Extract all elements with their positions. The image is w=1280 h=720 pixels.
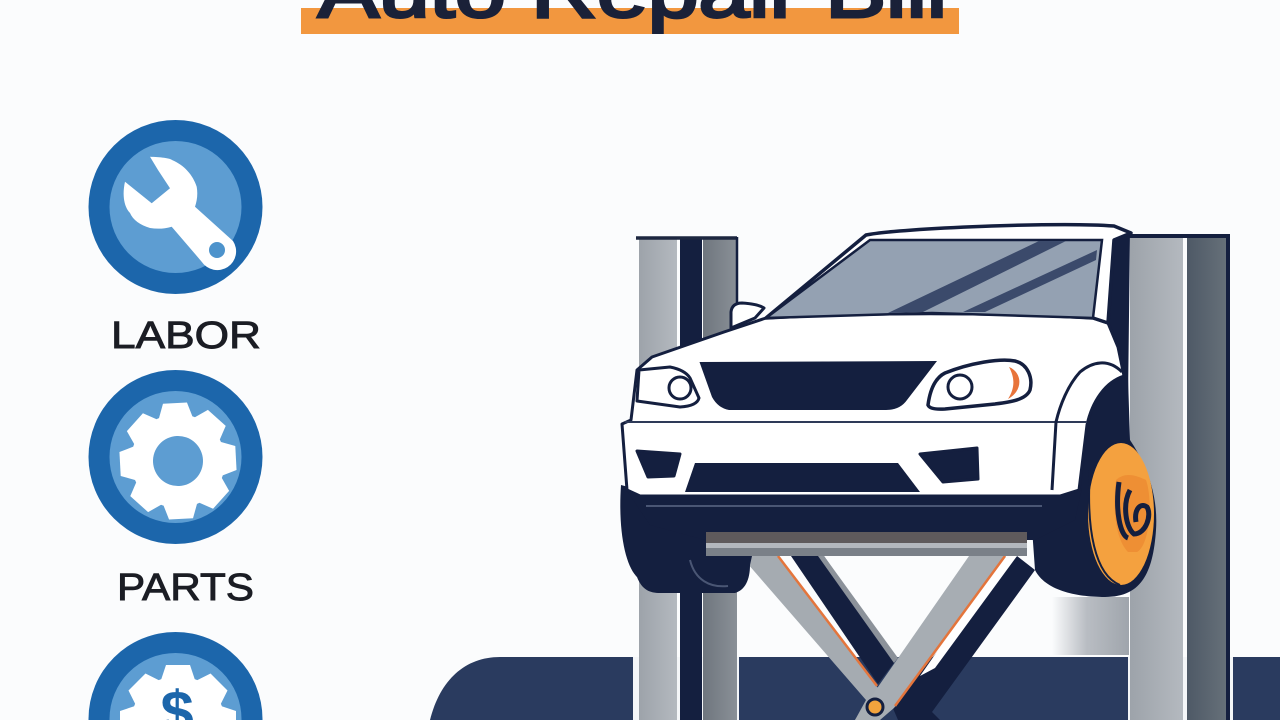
left wheel bbox=[620, 485, 760, 593]
orange brake disc bbox=[1088, 443, 1154, 585]
headlight amber crescent bbox=[1008, 367, 1019, 399]
grey post shadow patch bbox=[1052, 597, 1129, 655]
rear arm highlight bbox=[818, 556, 898, 663]
icon: cost gear with dollar sign bbox=[88, 632, 262, 720]
label: labor: LABOR bbox=[111, 315, 261, 357]
right headlight lens bbox=[948, 375, 972, 399]
disc shadow crescent bbox=[1089, 470, 1120, 585]
left headlight bbox=[637, 367, 699, 407]
orange edge left bbox=[778, 556, 877, 686]
windshield reflection 2 bbox=[963, 250, 1097, 312]
roof and A-pillar bbox=[766, 225, 1131, 323]
right lift post bbox=[1128, 234, 1233, 720]
left fog light bbox=[637, 451, 680, 477]
front dark arm bbox=[892, 556, 1035, 720]
title banner bbox=[301, 0, 959, 34]
orange edge right bbox=[895, 556, 1005, 706]
mirror bbox=[731, 303, 764, 328]
fender line bbox=[1052, 363, 1122, 490]
grey arm right bbox=[855, 556, 1006, 720]
left lift post bbox=[633, 237, 739, 720]
undercarriage highlight bbox=[646, 505, 1042, 507]
label: parts: PARTS bbox=[117, 567, 254, 609]
rear scissor arm bbox=[791, 556, 896, 684]
scissor lift bbox=[741, 556, 1035, 720]
pivot bolt bbox=[867, 699, 883, 715]
disc swirl bbox=[1118, 482, 1149, 538]
icon: parts gear bbox=[88, 370, 262, 544]
lower grille bbox=[685, 463, 920, 492]
left wheel highlight bbox=[690, 560, 728, 586]
car body bbox=[622, 314, 1124, 496]
grey arm left bbox=[741, 556, 878, 720]
front arm white gap bbox=[920, 556, 1017, 676]
undercarriage bbox=[625, 488, 1082, 540]
body crease line bbox=[625, 421, 1087, 423]
right tire bbox=[1030, 378, 1156, 597]
windshield bbox=[766, 240, 1102, 318]
icon: labor wrench bbox=[88, 120, 262, 294]
car bbox=[620, 225, 1156, 597]
grille bbox=[700, 361, 937, 410]
lift platform bbox=[706, 532, 1027, 556]
right fog light bbox=[920, 448, 978, 482]
dark floor band bbox=[430, 657, 1280, 720]
windshield reflection 1 bbox=[888, 241, 1066, 313]
disc inner hub bbox=[1114, 475, 1150, 552]
right headlight bbox=[928, 360, 1031, 409]
right pillar bbox=[1100, 232, 1130, 400]
left headlight lens bbox=[669, 377, 691, 399]
